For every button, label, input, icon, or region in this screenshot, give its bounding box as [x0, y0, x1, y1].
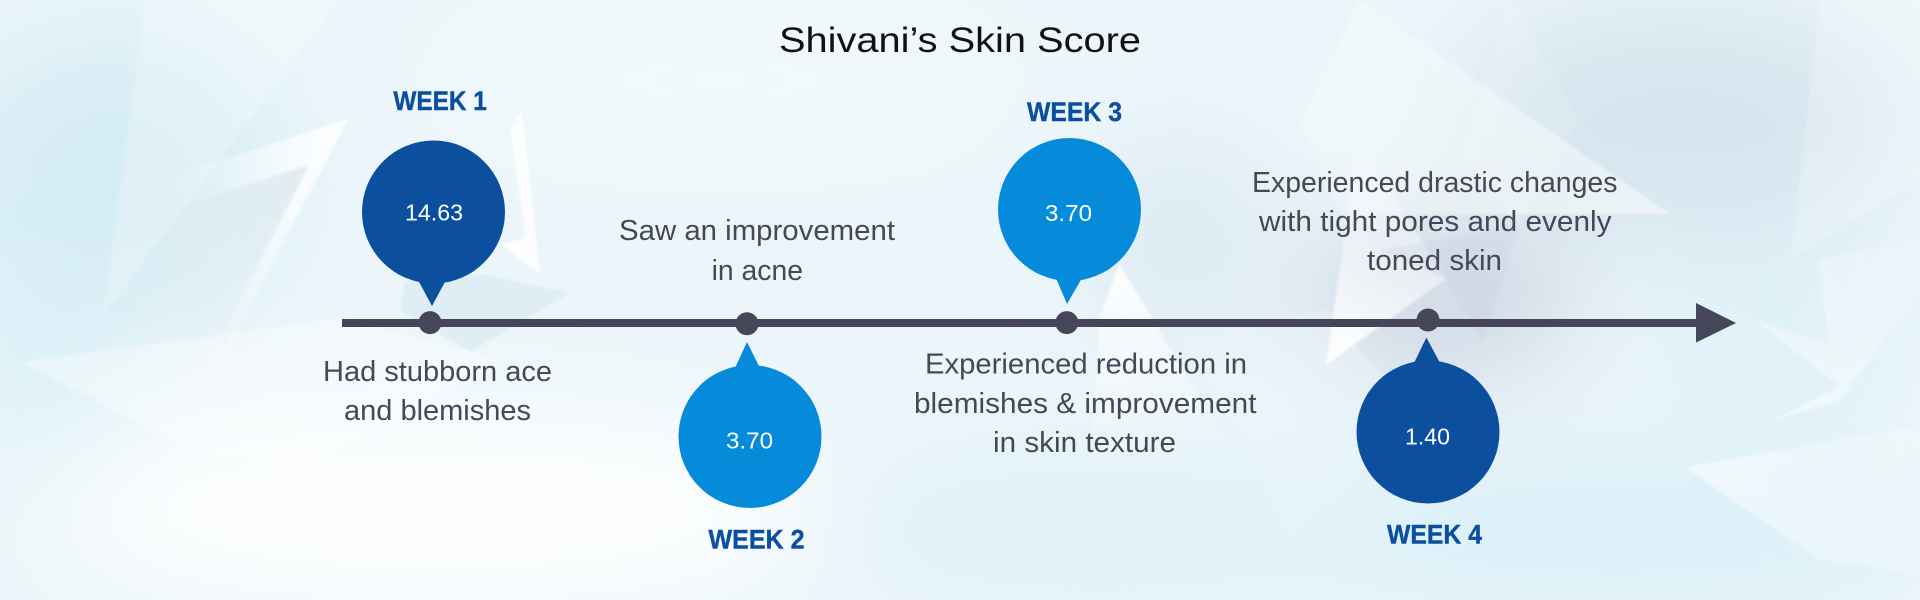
week 1 dot [418, 311, 442, 334]
week 3 description: blemishes & improvement [914, 388, 1256, 420]
timeline arrow [342, 303, 1736, 342]
week 1 milestone [323, 86, 552, 427]
week 3 score bubble [998, 138, 1141, 304]
week 3 label: WEEK 3 [1027, 97, 1122, 127]
week 1 score: 14.63 [405, 199, 463, 225]
week 2 score: 3.70 [726, 428, 773, 454]
week 2 milestone [619, 215, 895, 554]
title: Shivani’s Skin Score [779, 21, 1141, 60]
week 4 description: with tight pores and evenly [1258, 206, 1612, 238]
week 4 milestone [1252, 167, 1618, 549]
week 4 label: WEEK 4 [1387, 519, 1482, 549]
week 2 score bubble [678, 342, 822, 508]
week 1 description: and blemishes [344, 395, 531, 427]
week 4 dot [1416, 308, 1440, 332]
week 4 score: 1.40 [1405, 424, 1450, 450]
week 3 score: 3.70 [1045, 200, 1092, 226]
week 3 dot [1055, 311, 1078, 334]
week 3 description: in skin texture [993, 427, 1176, 459]
week 4 description: Experienced drastic changes [1252, 167, 1618, 199]
week 1 label: WEEK 1 [393, 86, 487, 116]
week 3 description: Experienced reduction in [925, 348, 1247, 380]
week 4 description: toned skin [1367, 245, 1502, 277]
week 2 description: Saw an improvement [619, 215, 895, 247]
week 1 score bubble [362, 140, 505, 306]
week 3 milestone [914, 97, 1256, 459]
week 1 description: Had stubborn ace [323, 356, 552, 388]
week 2 dot [736, 312, 758, 335]
week 2 description: in acne [712, 255, 803, 287]
week 4 score bubble [1356, 338, 1500, 504]
week 2 label: WEEK 2 [708, 524, 804, 554]
